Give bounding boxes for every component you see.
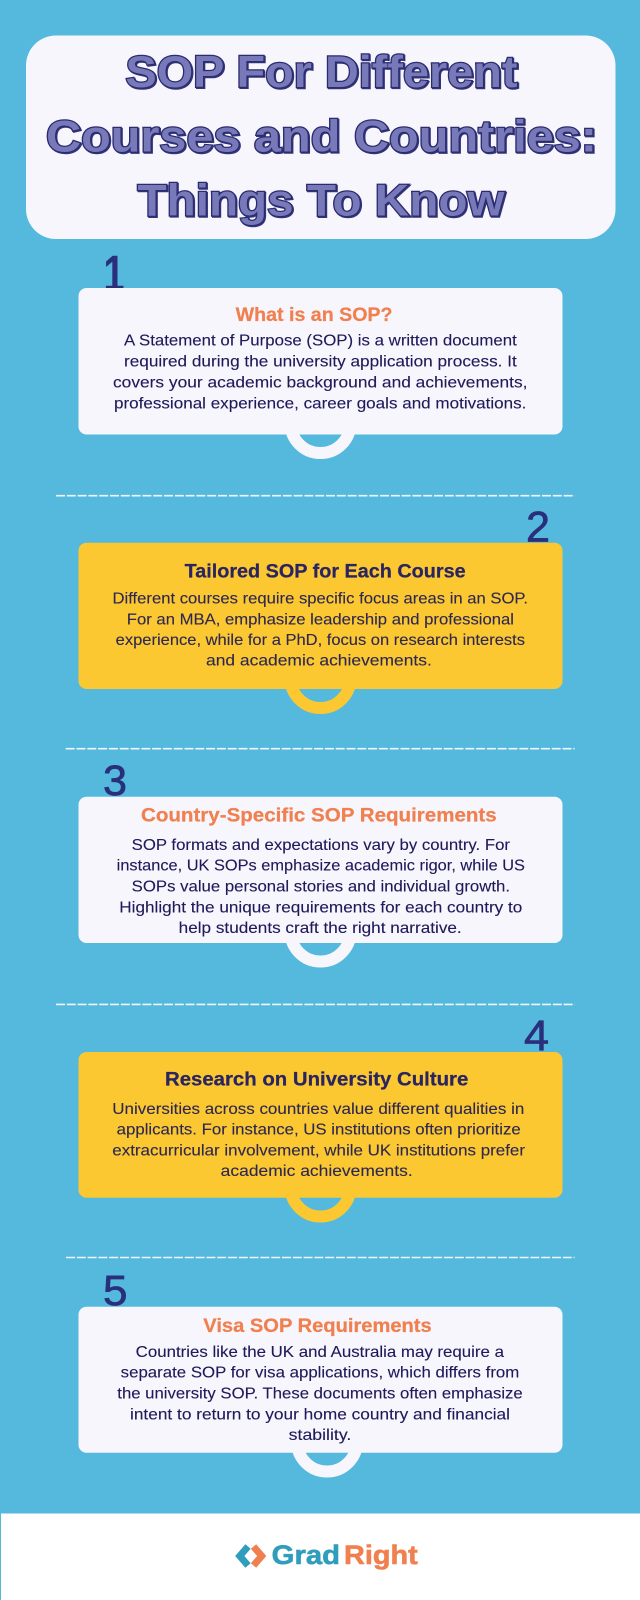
heading 2: Tailored SOP for Each Course (185, 561, 466, 583)
ring connector 1 (290, 393, 350, 453)
heading 3: Country-Specific SOP Requirements (141, 804, 497, 826)
number 3: 3 (103, 757, 127, 805)
ring connector 4 (290, 1156, 350, 1216)
body text 1: professional experience, career goals and motivations. (114, 395, 526, 412)
heading 4: Research on University Culture (165, 1068, 468, 1090)
number 5: 5 (103, 1267, 128, 1315)
number 2: 2 (526, 504, 550, 552)
number 4: 4 (524, 1012, 549, 1060)
panel: visa SOP requirements (78, 1307, 562, 1472)
heading 1: What is an SOP? (236, 304, 392, 326)
body text 4: applicants. For instance, US institutions often prioritize (117, 1122, 521, 1139)
title: Courses and Countries: (46, 112, 597, 162)
body text 3 (117, 837, 525, 937)
icon: orange right chevron (254, 1546, 262, 1566)
body text 5: separate SOP for visa applications, which differs from (121, 1365, 519, 1382)
body text 1: A Statement of Purpose (SOP) is a written document (124, 333, 518, 350)
body text 5: Countries like the UK and Australia may require a (136, 1344, 504, 1361)
card background 5 (78, 1307, 562, 1453)
body text 4: Universities across countries value different qualities in (112, 1101, 524, 1118)
body text 2 (112, 590, 528, 670)
title: SOP For Different (126, 48, 518, 97)
footer band (1, 1514, 640, 1600)
body text 3: SOP formats and expectations vary by country. For (132, 837, 510, 854)
body text 2: Different courses require specific focus areas in an SOP. (112, 590, 528, 607)
body text 3: help students craft the right narrative. (179, 920, 462, 937)
logo: GradRight (240, 1540, 418, 1570)
logo wordmark (272, 1540, 418, 1570)
ring connector 3 (290, 902, 350, 962)
body text 1: required during the university application process. It (124, 354, 518, 371)
body text 2: experience, while for a PhD, focus on research interests (116, 632, 525, 649)
body text 5: stability. (289, 1427, 351, 1444)
title (46, 48, 597, 226)
body text 4: academic achievements. (221, 1163, 413, 1180)
card background 3 (78, 797, 562, 943)
heading 5: Visa SOP Requirements (203, 1315, 432, 1337)
body text 4: extracurricular involvement, while UK institutions prefer (112, 1143, 525, 1160)
body text 1 (113, 333, 528, 412)
number 1: 1 (104, 245, 124, 302)
body text 5: the university SOP. These documents often emphasize (117, 1385, 523, 1402)
panel: research on university culture (78, 1052, 562, 1216)
card background 1 (78, 288, 562, 434)
title: Things To Know (138, 176, 505, 226)
body text 2: and academic achievements. (206, 653, 432, 670)
body text 5: intent to return to your home country and financial (130, 1406, 510, 1423)
body text 3: Highlight the unique requirements for each country to (119, 899, 523, 916)
body text 1: covers your academic background and achievements, (113, 375, 528, 392)
panel: what is an SOP (78, 288, 562, 453)
body text 3: SOPs value personal stories and individual growth. (132, 879, 510, 896)
ring connector 5 (297, 1412, 357, 1472)
body text 5 (117, 1344, 523, 1444)
ring connector 2 (290, 648, 350, 708)
title panel (26, 36, 616, 239)
body text 2: For an MBA, emphasize leadership and professional (127, 611, 514, 628)
card background 4 (78, 1052, 562, 1198)
logo wordmark: Right (344, 1540, 418, 1570)
body text 4 (112, 1101, 525, 1180)
panel: tailored SOP for each course (78, 543, 562, 708)
panel: country-specific SOP requirements (78, 797, 562, 962)
body text 3: instance, UK SOPs emphasize academic rigor, while US (117, 858, 525, 875)
logo wordmark: Grad (272, 1540, 340, 1570)
card background 2 (78, 543, 562, 689)
icon: teal left chevron (240, 1546, 248, 1566)
